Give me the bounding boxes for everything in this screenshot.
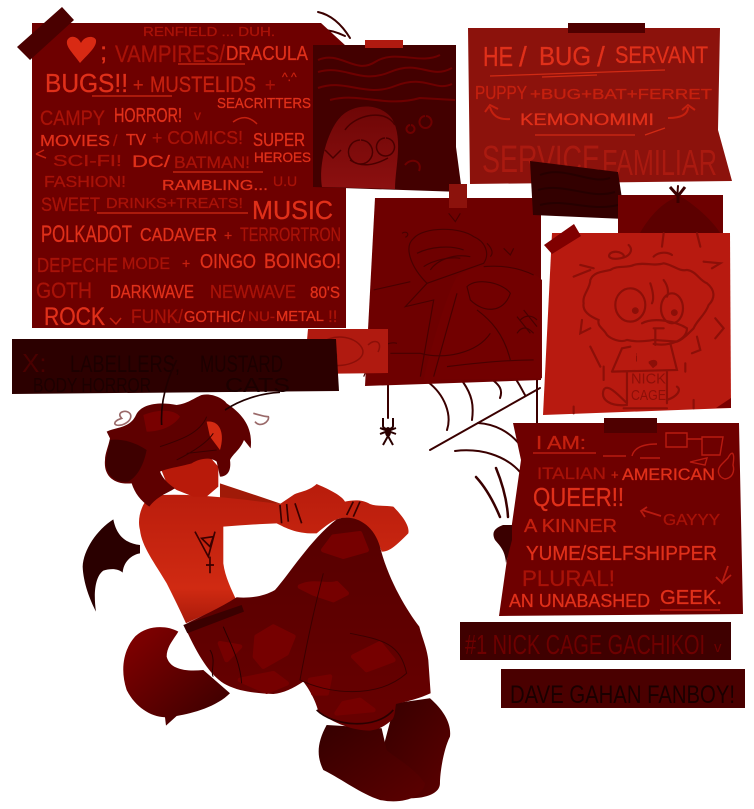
text block: dislikes: BODY HORROR: [33, 375, 151, 397]
sketch: character with nick cage shirt: [574, 233, 724, 413]
text block: pronouns: /: [597, 41, 605, 72]
text block: dislikes: MUSTARD: [200, 351, 283, 378]
text block: likes list: BUGS!!: [45, 68, 128, 98]
text block: likes list: BATMAN!: [174, 153, 250, 172]
text block: likes list: METAL: [276, 308, 324, 325]
tail: [123, 627, 230, 726]
text block: likes list: CADAVER: [140, 225, 217, 245]
text block: dislikes: CATS: [225, 375, 290, 397]
back arm: [220, 483, 282, 504]
text block: likes list: v: [194, 107, 201, 123]
panel: nick cage post-it: [543, 224, 731, 415]
text block: likes list: MUSTELIDS: [150, 72, 256, 97]
text block: pronouns: HE: [483, 41, 513, 72]
icon: hanging spider: [380, 418, 396, 445]
text block: I am list: I AM:: [536, 433, 586, 453]
text block: likes list: DEPECHE: [37, 255, 118, 277]
panel: center sketch: [364, 184, 542, 386]
torso and arm: [139, 484, 409, 623]
text block: likes list: DC/: [132, 152, 170, 171]
panel: dislikes: [12, 339, 339, 397]
sketch: character with nick cage shirt: CAGE: [631, 388, 666, 404]
icon: heart: [67, 37, 96, 63]
text block: likes list: MODE: [122, 254, 170, 273]
panel: I am list: [499, 418, 743, 616]
doodle: glasses and nose: [533, 433, 734, 610]
text block: pronouns: +BUG+BAT+FERRET: [530, 86, 712, 103]
text block: pronouns: [475, 41, 717, 183]
text block: likes list: DARKWAVE: [110, 282, 194, 302]
text block: likes list: SUPER: [253, 130, 305, 150]
text block: pronouns: SERVANT: [615, 42, 708, 69]
tape: likes panel: [17, 7, 74, 60]
text block: likes list: ROCK: [44, 303, 105, 331]
text block: dislikes: X:: [22, 348, 47, 378]
text block: likes list: FASHION!: [44, 174, 126, 191]
text block: likes list: U.U: [273, 173, 297, 189]
text block: likes list: NU-: [248, 308, 275, 324]
sketch: character with nick cage shirt: NICK: [631, 371, 666, 387]
text block: likes list: GOTH: [36, 278, 92, 303]
text block: likes list: RAMBLING...: [162, 177, 268, 194]
text block: likes list: BOINGO!: [264, 250, 341, 273]
necklace and bracelets: [195, 502, 360, 573]
bug creature peeking behind note: [493, 525, 512, 563]
text block: likes list: GOTHIC/: [184, 309, 246, 326]
tape: sketch panel: [365, 40, 403, 48]
text block: likes list: POLKADOT: [41, 221, 132, 248]
head skin: [160, 453, 218, 497]
text block: pronouns: PUPPY: [475, 83, 527, 103]
text block: likes list: MOVIES: [40, 133, 110, 150]
text block: I am list: YUME/SELFSHIPPER: [526, 543, 717, 565]
panel: bug sketch behind note: [618, 187, 723, 235]
sketch: character portrait: [318, 55, 455, 189]
text block: I am list: QUEER!!: [533, 482, 624, 512]
text block: I am list: GEEK.: [660, 587, 722, 609]
tape: center panel: [449, 184, 467, 208]
text block: likes list: ^.^: [282, 70, 297, 84]
text block: likes list: !!: [328, 307, 337, 326]
text block: likes list: DRINKS+TREATS!: [106, 195, 243, 212]
text block: I am list: AN UNABASHED: [509, 591, 650, 611]
tape: pronouns panel: [568, 23, 645, 33]
arrows: I am panel: [641, 507, 731, 583]
text block: likes list: +: [224, 227, 232, 243]
wing: [83, 519, 140, 612]
text block: likes list: MUSIC: [252, 195, 333, 225]
text block: likes list: [36, 24, 341, 331]
panel: likes: [17, 7, 346, 331]
sketch: character with nick cage shirt: i: [635, 353, 638, 365]
arrows: kemonomimi: [485, 105, 695, 119]
text block: I am list: A KINNER: [524, 516, 617, 536]
text block: I am list: ITALIAN: [537, 464, 606, 483]
text block: likes list: NEWWAVE: [210, 282, 296, 302]
text block: likes list: +: [182, 255, 190, 271]
text block: likes list: +: [133, 75, 144, 95]
text block: likes list: 80'S: [310, 283, 340, 302]
text block: likes list: + COMICS!: [152, 128, 243, 148]
note: small dark scribble: [530, 161, 625, 219]
text block: likes list: TV: [126, 132, 146, 149]
text block: likes list: FUNK/: [131, 307, 184, 328]
text block: likes list: ;: [100, 36, 107, 66]
text block: likes list: SWEET: [41, 195, 100, 216]
text block: likes list: RENFIELD ... DUH.: [143, 24, 275, 39]
text block: I am list: AMERICAN: [622, 465, 715, 484]
badge: dave gahan: [501, 669, 745, 709]
panel: small doodle note: [304, 329, 388, 374]
text block: I am list: [509, 433, 722, 611]
text block: likes list: SEACRITTERS: [217, 95, 311, 112]
sketch: embracing couple: [364, 213, 542, 380]
front sock: [319, 725, 425, 801]
text block: pronouns: BUG: [539, 41, 591, 71]
text block: pronouns: /: [519, 41, 527, 72]
badge: nick cage: v: [714, 639, 722, 656]
text block: likes list: TERRORTRON: [240, 225, 341, 246]
tape: I am panel: [604, 418, 657, 433]
text block: likes list: VAMPIRES/: [115, 41, 225, 68]
panel: sketch with scribbles: [313, 40, 462, 192]
web strands and antennae behind the notes: [305, 12, 678, 517]
text block: likes list: HORROR!: [114, 105, 182, 127]
tape: post-it: [544, 224, 581, 254]
text block: likes list: DRACULA: [226, 43, 309, 65]
text block: pronouns: SERVICE: [482, 139, 600, 181]
text block: pronouns: KEMONOMIMI: [520, 110, 654, 129]
text block: likes list: /: [113, 133, 118, 150]
panel: pronouns: [468, 23, 732, 184]
text block: I am list: +: [611, 467, 619, 482]
antennae: [161, 360, 280, 425]
text block: likes list: OINGO: [200, 251, 256, 273]
text block: likes list: SCI-FI!: [53, 153, 122, 170]
text block: I am list: GAYYY: [663, 512, 720, 529]
text block: dislikes: [22, 348, 290, 397]
text block: likes list: HEROES: [254, 149, 311, 165]
text block: dislikes: LABELLERS,: [70, 351, 180, 378]
pants: [183, 518, 431, 731]
text block: likes list: +: [265, 75, 276, 95]
figure: seated bat-winged character: [83, 360, 450, 801]
text block: I am list: PLURAL!: [522, 566, 615, 591]
text block: likes list: CAMPY: [40, 107, 105, 130]
hair: [105, 394, 251, 507]
hearts: [115, 411, 268, 425]
back sock: [380, 698, 450, 798]
